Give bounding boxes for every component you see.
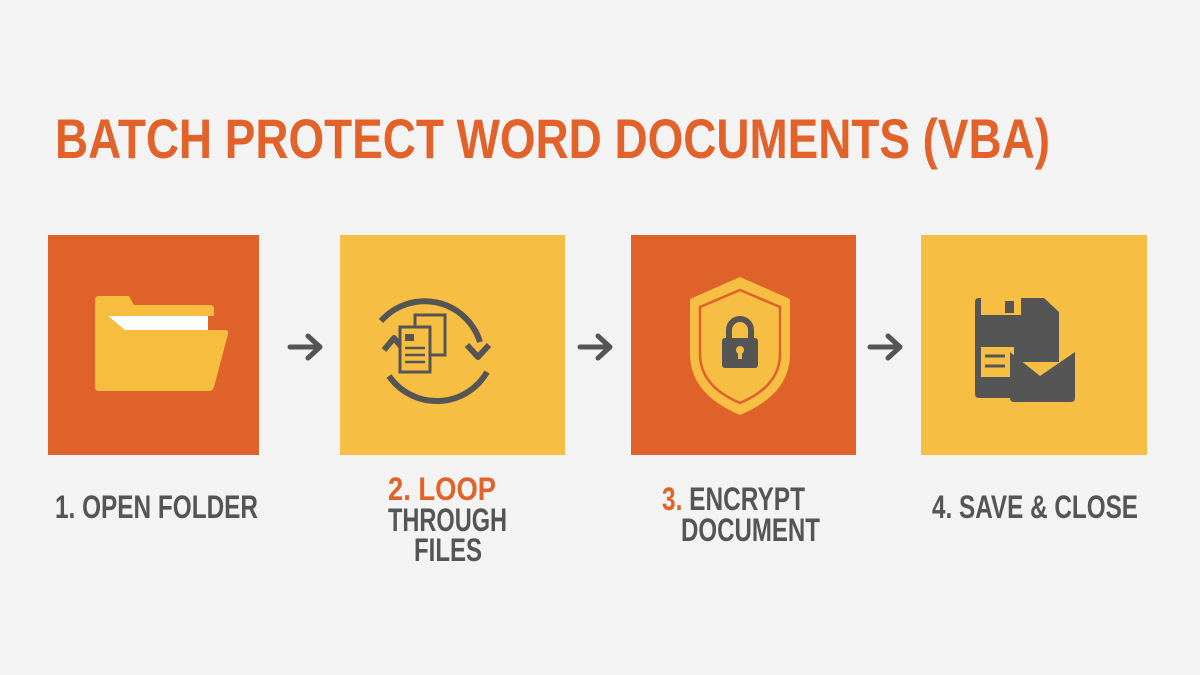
icon: folder — [95, 296, 228, 391]
arrow 1 — [290, 336, 320, 358]
label 2: THROUGH — [388, 502, 507, 538]
label 3: 3. ENCRYPT — [662, 481, 805, 517]
arrow 2 — [580, 336, 610, 358]
icon: shield lock — [690, 277, 790, 415]
label 1: 1. OPEN FOLDER — [55, 489, 258, 525]
icon: loop documents — [381, 301, 489, 401]
panel: step 2 loop — [340, 235, 565, 455]
label 2: FILES — [414, 532, 482, 568]
icon: floppy and envelope — [975, 298, 1075, 402]
label 2 — [388, 471, 507, 568]
label 3 — [662, 481, 820, 548]
label 3: DOCUMENT — [681, 512, 820, 548]
label 4: 4. SAVE & CLOSE — [932, 489, 1138, 525]
arrow 3 — [870, 336, 900, 358]
panel: step 3 encrypt — [631, 235, 856, 455]
panel: step 1 open folder — [48, 235, 259, 455]
label 2: 2. LOOP — [388, 471, 496, 507]
panel: step 4 save — [921, 235, 1147, 455]
